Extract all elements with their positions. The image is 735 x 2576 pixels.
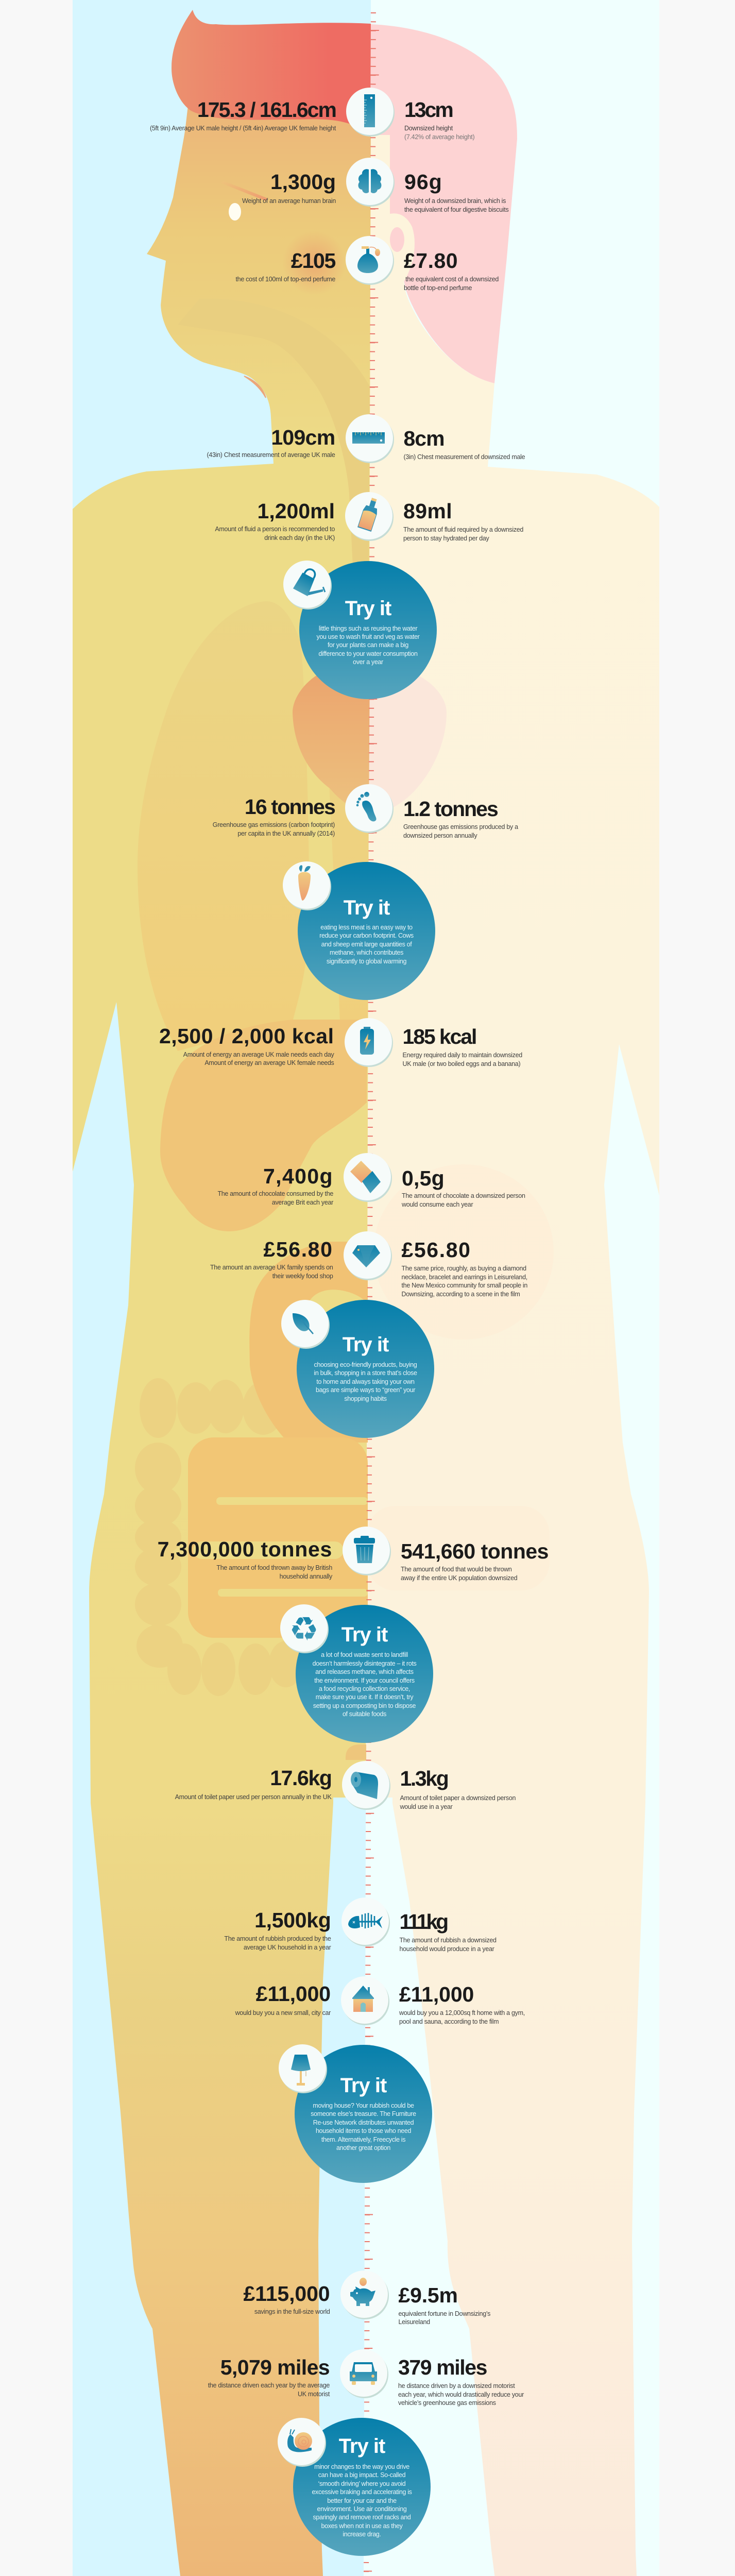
downsized fluid caption: person to stay hydrated per day: [403, 535, 489, 542]
carbon footprint caption: [213, 821, 335, 837]
perfume cost caption: the cost of 100ml of top-end perfume: [236, 276, 335, 283]
downsized savings figure: £9.5m: [399, 2283, 458, 2307]
eyebrow: [220, 181, 268, 201]
icon: toilet roll: [342, 1761, 391, 1811]
try it circle: boxes when not in use as they: [321, 2522, 403, 2530]
downsized miles caption: each year, which would drastically reduce your: [398, 2391, 524, 2398]
heart, left: [293, 670, 370, 819]
stat row: chocolate: [217, 1153, 525, 1208]
icon: diamond: [344, 1231, 392, 1280]
try it circle: someone else’s treasure. The Furniture: [311, 2110, 416, 2117]
try it circle: to home and always taking your own: [316, 1378, 415, 1385]
throat shadow: [244, 376, 266, 398]
home price caption: pool and sauna, according to the film: [399, 2018, 499, 2025]
try it circle: in bulk, shopping in a store that’s close: [314, 1369, 417, 1377]
downsized food waste caption: away if the entire UK population downsized: [401, 1574, 517, 1582]
panel: try it, food recycling: [72, 1605, 659, 1743]
chocolate caption: The amount of chocolate consumed by the: [217, 1190, 333, 1197]
eye: [229, 203, 241, 221]
downsized footprint figure: 1.2 tonnes: [403, 797, 498, 821]
downsized perfume caption: the equivalent cost of a downsized: [405, 276, 499, 283]
carbon footprint caption: Greenhouse gas emissions (carbon footprint): [213, 821, 335, 828]
food waste caption: [216, 1564, 332, 1581]
downsized perfume caption: bottle of top-end perfume: [404, 284, 472, 292]
downsized brain figure: 96g: [404, 170, 442, 194]
same-price caption: The same price, roughly, as buying a diamond: [402, 1265, 526, 1272]
downsized rubbish figure: 111kg: [400, 1910, 447, 1934]
miles caption: [208, 2381, 330, 2398]
try it circle: methane, which contributes: [330, 949, 403, 956]
downsized brain caption: the equivalent of four digestive biscuits: [404, 206, 508, 213]
same-price figure: £56.80: [402, 1238, 471, 1262]
downsized savings caption: Leisureland: [399, 2318, 430, 2326]
icon: tape ruler: [346, 414, 394, 463]
try it circle: reduce your carbon footprint. Cows: [319, 932, 414, 939]
energy caption: Amount of energy an average UK male needs each day: [183, 1051, 334, 1058]
right ear hole: [390, 227, 404, 252]
downsized savings caption: [399, 2310, 490, 2327]
stat row: eleven thousand pounds: [72, 1976, 659, 2028]
food shop caption: [210, 1264, 333, 1280]
average height figure: 175.3 / 161.6cm: [197, 98, 336, 122]
stat row: carbon footprint: [213, 784, 518, 839]
right organs, faint: [367, 1164, 554, 1590]
rubbish figure: 1,500kg: [254, 1908, 331, 1932]
chocolate caption: average Brit each year: [272, 1198, 333, 1206]
try it circle: increase drag.: [343, 2531, 381, 2538]
downsized rubbish caption: The amount of rubbish a downsized: [400, 1937, 497, 1944]
toilet paper figure: 17.6kg: [270, 1766, 332, 1790]
icon: house: [341, 1976, 390, 2027]
try it circle: doesn’t harmlessly disintegrate – it rots: [313, 1660, 416, 1667]
downsized footprint caption: [403, 823, 518, 839]
try it circle: them. Alternatively, Freecycle is: [321, 2136, 405, 2143]
icon: chocolate bar: [344, 1153, 392, 1202]
energy caption: [183, 1051, 334, 1066]
neck band: [178, 299, 370, 567]
downsized food waste caption: The amount of food that would be thrown: [401, 1566, 512, 1573]
downsized energy figure: 185 kcal: [403, 1025, 476, 1048]
savings caption: savings in the full-size world: [254, 2308, 330, 2315]
panel: try it, driving: [72, 2417, 659, 2555]
downsized height caption: Downsized height: [404, 125, 453, 132]
downsized brain caption: [404, 197, 509, 213]
icon: piggy bank: [340, 2270, 389, 2321]
try it circle: [295, 2045, 432, 2183]
downsized height caption: [404, 125, 474, 140]
try it circle: and sheep emit large quantities of: [321, 941, 412, 948]
downsized chocolate caption: [402, 1192, 525, 1208]
car price figure: £11,000: [256, 1982, 331, 2006]
panel: try it, moving house: [72, 2045, 659, 2183]
downsized food waste figure: 541,660 tonnes: [401, 1539, 549, 1563]
try it circle: Try it: [341, 1623, 387, 1646]
stat row: food waste: [72, 1527, 659, 1583]
rubbish caption: The amount of rubbish produced by the: [224, 1935, 331, 1942]
stat row: chest: [207, 414, 525, 463]
try it circle: significantly to global warming: [327, 958, 406, 965]
carbon footprint figure: 16 tonnes: [245, 795, 335, 819]
try it circle: eating less meat is an easy way to: [320, 924, 413, 931]
try it circle: Re-use Network distributes unwanted: [313, 2119, 414, 2126]
large intestine bumps: [135, 1378, 317, 1696]
downsized toilet paper caption: Amount of toilet paper a downsized person: [400, 1794, 516, 1802]
downsized miles caption: he distance driven by a downsized motorist: [398, 2382, 515, 2389]
icon: battery: [345, 1018, 393, 1067]
downsized fluid figure: 89ml: [403, 499, 452, 523]
stat row: miles driven: [72, 2349, 659, 2409]
stat row: height: [150, 88, 474, 140]
downsized chocolate caption: would consume each year: [402, 1200, 473, 1208]
try it circle: Try it: [343, 1333, 388, 1356]
right body, pale cream: [366, 135, 659, 2576]
stat row: toilet paper: [72, 1761, 659, 1812]
try it circle: [297, 1300, 434, 1438]
downsized chest caption: (3in) Chest measurement of downsized male: [404, 453, 525, 461]
carbon footprint caption: per capita in the UK annually (2014): [237, 829, 335, 837]
try it circle: for your plants can make a big: [328, 641, 408, 649]
same-price caption: the New Mexico community for small people in: [402, 1282, 527, 1289]
downsized energy caption: Energy required daily to maintain downsized: [403, 1052, 522, 1059]
icon: water bottle: [345, 492, 394, 541]
fluid caption: Amount of fluid a person is recommended to: [215, 526, 335, 533]
try it circle: the environment. If your council offers: [314, 1677, 415, 1684]
lung, left: [138, 601, 310, 1051]
try it circle: [299, 561, 437, 699]
downsized toilet paper caption: would use in a year: [400, 1803, 453, 1810]
downsized perfume caption: [404, 276, 499, 292]
try it circle: a food recycling collection service,: [319, 1685, 410, 1692]
try it circle: shopping habits: [344, 1395, 387, 1402]
left body, gold to orange: [73, 106, 371, 2576]
food shop figure: £56.80: [263, 1238, 333, 1261]
downsized energy caption: UK male (or two boiled eggs and a banana): [403, 1060, 520, 1067]
downsized chocolate figure: 0,5g: [402, 1166, 445, 1190]
try it circle: make sure you use it. If it doesn’t, try: [316, 1693, 413, 1701]
car price caption: would buy you a new small, city car: [235, 2009, 331, 2016]
icon: snail: [278, 2417, 327, 2468]
cheek glow: [282, 231, 346, 295]
downsized food waste caption: [401, 1565, 517, 1582]
downsized chest figure: 8cm: [404, 427, 445, 450]
same-price caption: Downsizing, according to a scene in the film: [402, 1290, 520, 1297]
try it circle: Try it: [344, 896, 389, 919]
try it circle: a lot of food waste sent to landfill: [321, 1651, 408, 1658]
fluid caption: [215, 526, 335, 541]
try it circle: bags are simple ways to “green” your: [316, 1386, 415, 1394]
miles figure: 5,079 miles: [220, 2355, 330, 2379]
savings figure: £115,000: [244, 2282, 330, 2306]
average height caption: (5ft 9in) Average UK male height / (5ft 4in) Average UK female height: [150, 125, 336, 132]
try it circle: Try it: [345, 597, 391, 620]
home price caption: would buy you a 12,000sq ft home with a gym,: [399, 2009, 525, 2016]
try it circle: setting up a composting bin to dispose: [313, 1702, 416, 1709]
panel: try it, shopping: [281, 1300, 434, 1438]
downsized height figure: 13cm: [404, 98, 452, 122]
try it circle: and releases methane, which affects: [315, 1668, 414, 1675]
stat row: perfume: [236, 236, 499, 292]
colon column: [249, 1242, 368, 1443]
downsized miles caption: vehicle’s greenhouse gas emissions: [398, 2399, 496, 2406]
downsized rubbish caption: household would produce in a year: [400, 1945, 494, 1953]
icon: perfume bottle: [346, 236, 394, 285]
energy caption: Amount of energy an average UK female needs: [204, 1059, 334, 1066]
icon: recycling: [280, 1604, 330, 1655]
downsized fluid caption: The amount of fluid required by a downsized: [403, 526, 523, 533]
try it circle: sparingly and remove roof racks and: [313, 2514, 411, 2521]
fluid figure: 1,200ml: [258, 499, 335, 523]
downsized fluid caption: [403, 526, 523, 542]
average brain caption: Weight of an average human brain: [242, 197, 336, 205]
food shop caption: their weekly food shop: [272, 1273, 333, 1280]
try it circle: another great option: [336, 2144, 390, 2151]
bladder: [346, 1744, 366, 1760]
try it circle: Try it: [339, 2435, 385, 2458]
downsized energy caption: [403, 1052, 522, 1067]
try it circle: minor changes to the way you drive: [314, 2463, 409, 2470]
try it circle: little things such as reusing the water: [319, 624, 417, 632]
toilet paper caption: Amount of toilet paper used per person annually in the UK: [175, 1793, 332, 1801]
miles caption: UK motorist: [298, 2391, 330, 2398]
downsized toilet paper caption: [400, 1794, 516, 1811]
downsized miles figure: 379 miles: [398, 2355, 487, 2379]
icon: car: [340, 2349, 389, 2400]
try it circle: ‘smooth driving’ where you avoid: [318, 2480, 405, 2487]
food waste caption: household annually: [280, 1572, 332, 1580]
food shop caption: The amount an average UK family spends on: [210, 1264, 333, 1271]
panel: try it, water: [283, 561, 437, 699]
rubbish caption: average UK household in a year: [244, 1943, 331, 1951]
downsized footprint caption: Greenhouse gas emissions produced by a: [403, 823, 518, 831]
chocolate caption: [217, 1190, 334, 1206]
downsized perfume figure: £7.80: [404, 249, 458, 273]
hair, left: [172, 10, 371, 124]
miles caption: the distance driven each year by the average: [208, 2382, 330, 2389]
food waste figure: 7,300,000 tonnes: [158, 1537, 332, 1561]
average brain figure: 1,300g: [270, 170, 336, 194]
downsized footprint caption: downsized person annually: [403, 832, 477, 839]
panel: try it, meat: [283, 861, 435, 1000]
stat row: rubbish: [72, 1897, 659, 1954]
downsized miles caption: [398, 2382, 524, 2407]
stomach: [160, 1020, 368, 1231]
perfume cost figure: £105: [291, 249, 335, 273]
try it circle: over a year: [353, 658, 383, 666]
try it circle: better for your car and the: [327, 2497, 397, 2504]
icon: watering can: [283, 561, 332, 609]
rubbish caption: [224, 1935, 331, 1952]
same-price caption: necklace, bracelet and earrings in Leisureland,: [402, 1274, 527, 1281]
icon: ruler: [346, 88, 395, 137]
icon: leaf: [281, 1300, 331, 1350]
ruler ticks: [365, 12, 375, 2576]
try it circle: environment. Use air conditioning: [317, 2505, 406, 2513]
chest figure: 109cm: [271, 426, 335, 449]
right head, pink: [370, 24, 517, 383]
try it circle: can have a big impact. So-called: [318, 2471, 405, 2479]
try it circle: you use to wash fruit and veg as water: [316, 633, 419, 640]
same-price caption: [402, 1265, 527, 1297]
downsized toilet paper figure: 1.3kg: [400, 1767, 448, 1790]
downsized height caption: (7.42% of average height): [404, 133, 474, 140]
energy figure: 2,500 / 2,000 kcal: [159, 1024, 334, 1048]
icon: footprint: [345, 784, 394, 833]
try it circle: household items to those who need: [316, 2127, 411, 2134]
try it circle: excessive braking and accelerating is: [312, 2488, 412, 2496]
icon: fish bone: [341, 1897, 390, 1948]
home price figure: £11,000: [399, 1982, 474, 2006]
try it circle: [298, 862, 435, 1000]
small intestine: [188, 1437, 368, 1638]
stat row: food shop: [210, 1231, 527, 1297]
lung, right piece: [329, 773, 369, 1023]
home price caption: [399, 2009, 525, 2026]
small intestine gaps: [193, 1290, 368, 1597]
chest caption: (43in) Chest measurement of average UK male: [207, 451, 335, 459]
icon: brain: [346, 158, 395, 207]
icon: recycling: ♻: [289, 1611, 319, 1649]
stat row: fluid: [215, 492, 523, 542]
icon: carrot: [283, 861, 331, 910]
stat row: energy: [159, 1018, 522, 1067]
try it circle: [293, 2417, 431, 2555]
fluid caption: drink each day (in the UK): [264, 534, 335, 541]
try it circle: moving house? Your rubbish could be: [313, 2102, 414, 2109]
stat row: brain: [242, 158, 509, 213]
stat row: savings: [72, 2270, 659, 2327]
downsized rubbish caption: [400, 1936, 497, 1953]
icon: lamp: [279, 2044, 328, 2095]
try it circle: choosing eco-friendly products, buying: [314, 1361, 417, 1368]
right heart, faint: [369, 670, 447, 819]
chocolate figure: 7,400g: [263, 1164, 333, 1188]
downsized chocolate caption: The amount of chocolate a downsized person: [402, 1192, 525, 1199]
downsized savings caption: equivalent fortune in Downsizing’s: [399, 2310, 490, 2317]
try it circle: [296, 1605, 433, 1743]
try it circle: difference to your water consumption: [318, 650, 418, 657]
icon: bin: [343, 1527, 392, 1577]
food waste caption: The amount of food thrown away by British: [216, 1564, 332, 1571]
downsized brain caption: Weight of a downsized brain, which is: [404, 197, 506, 205]
try it circle: Try it: [340, 2074, 386, 2097]
try it circle: of suitable foods: [343, 1710, 386, 1718]
